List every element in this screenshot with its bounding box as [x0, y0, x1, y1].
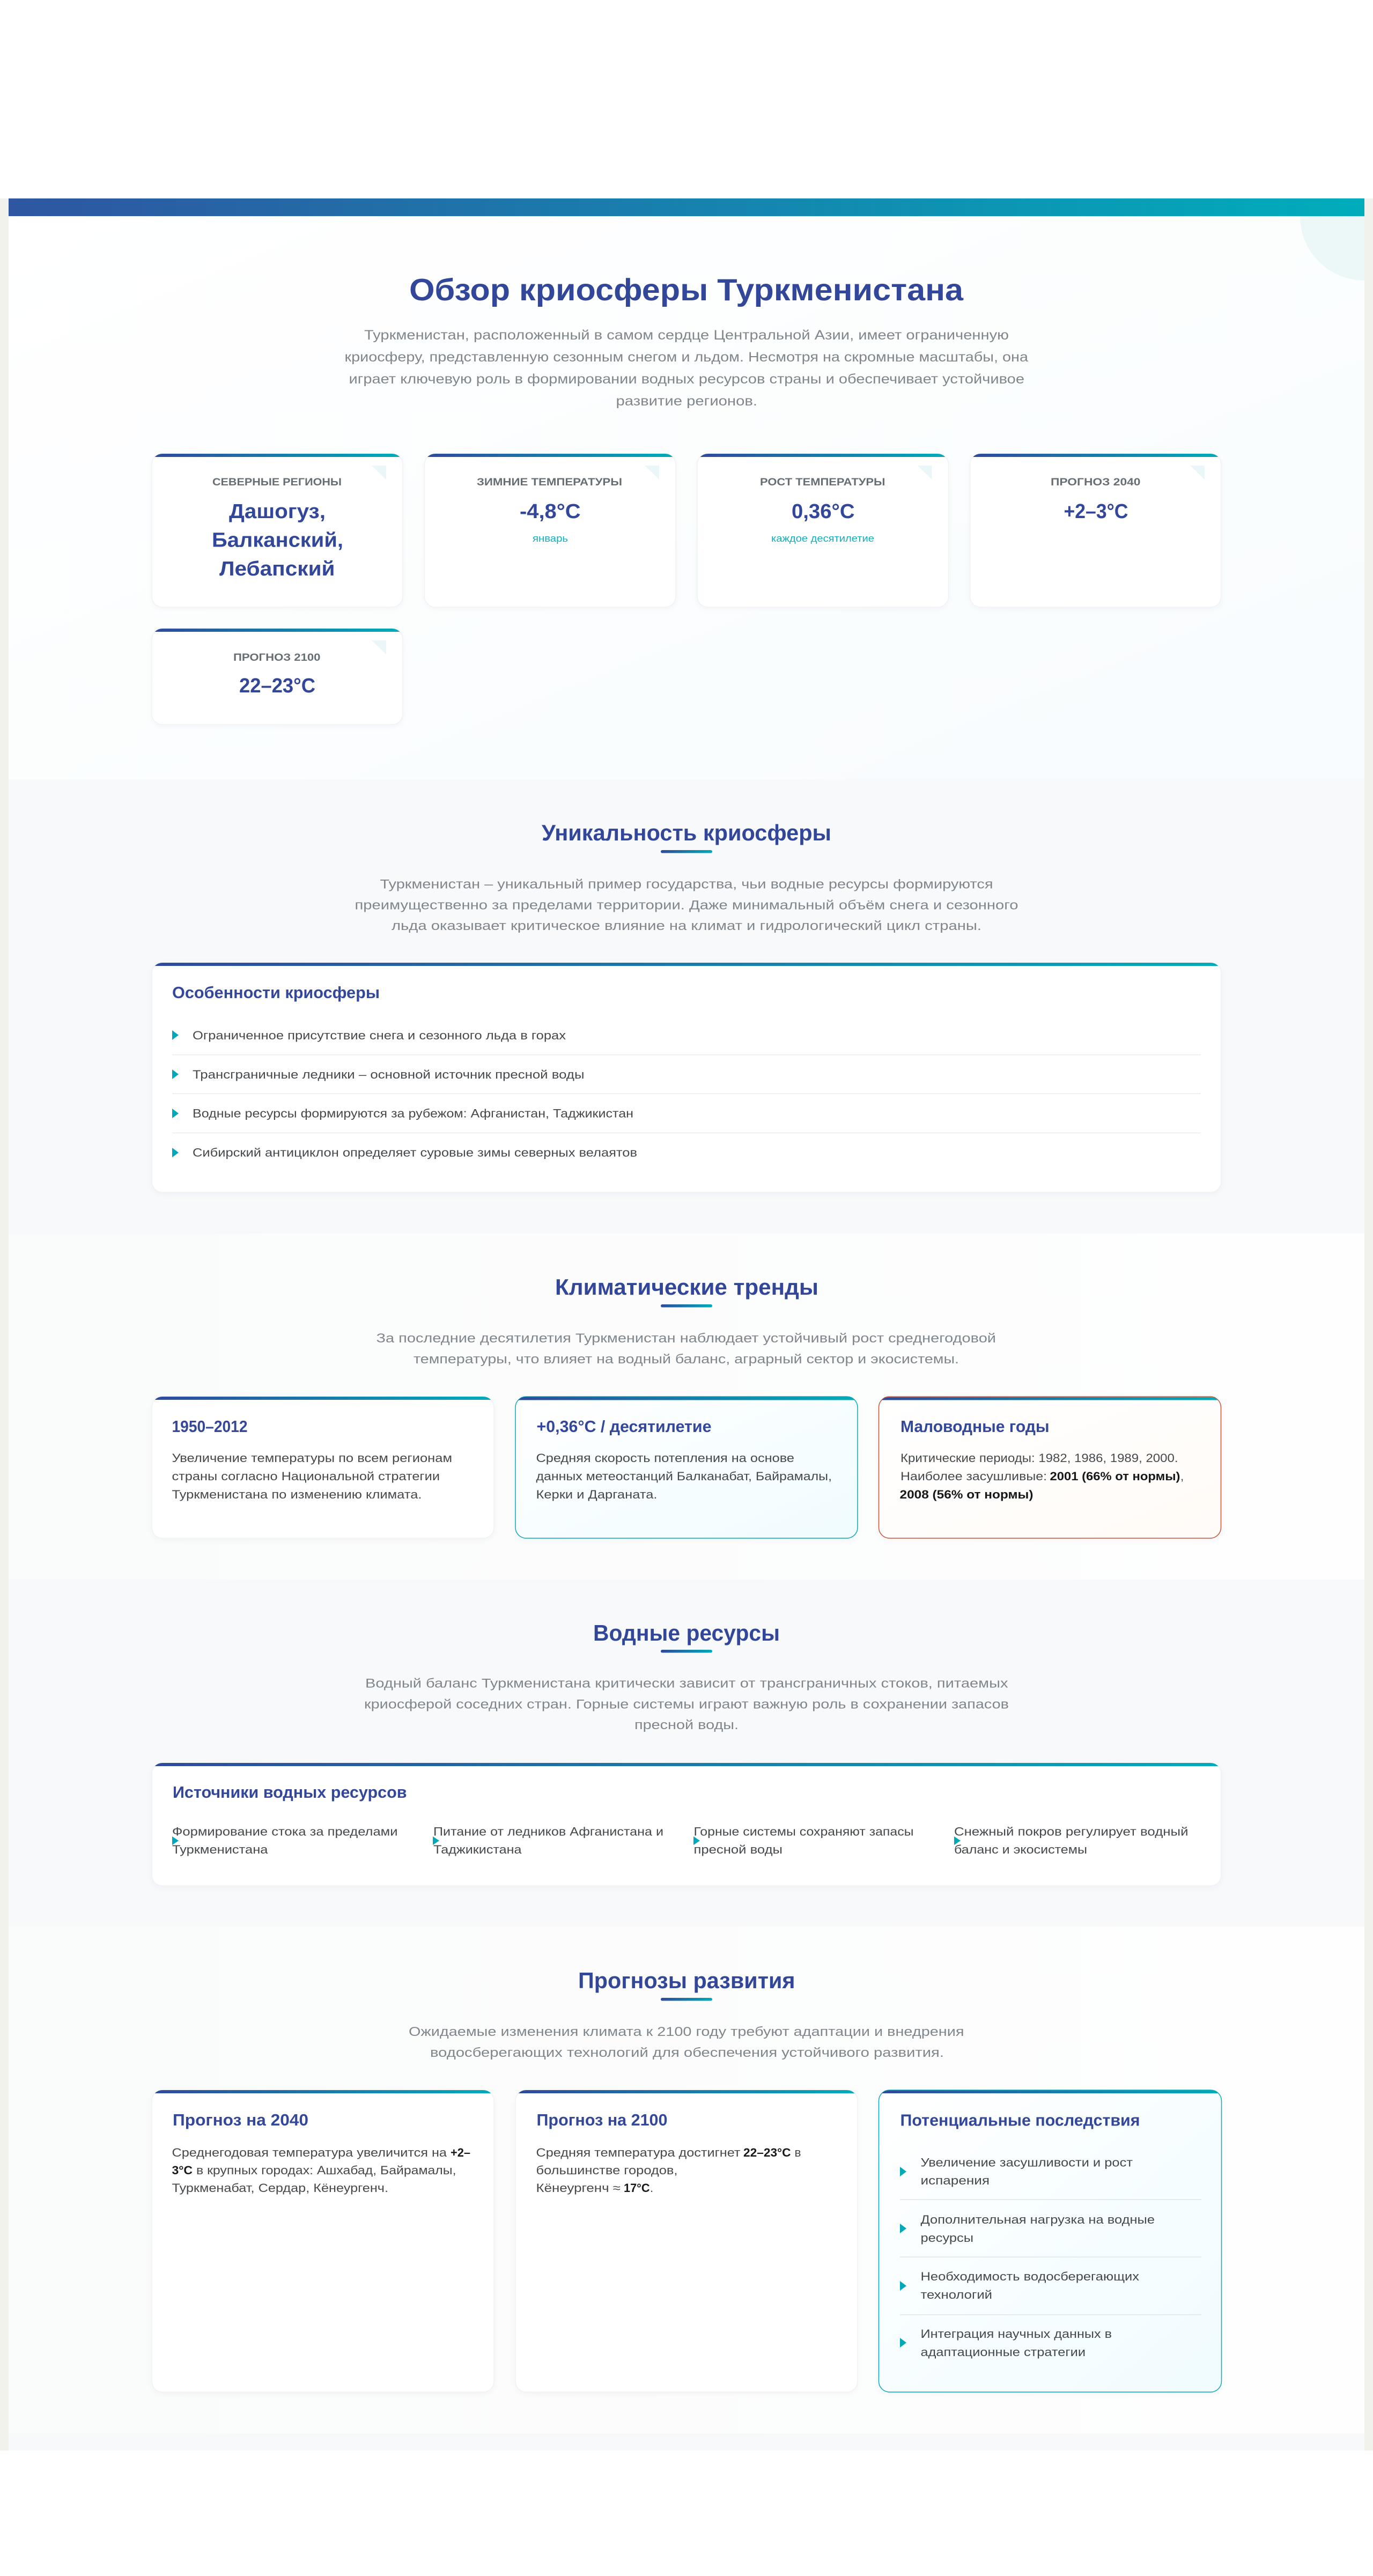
panel: источники водных ресурсов: Источники водных ресурсов [173, 1783, 407, 1802]
card: прогноз на 2100: большинстве городов, [536, 2164, 678, 2177]
panel: особенности криосферы: Особенности криосферы [172, 984, 380, 1002]
card: маловодные годы: Наиболее засушливые: [900, 1470, 1047, 1483]
card: прогноз на 2100: Кёнеургенч ≈ [536, 2181, 621, 2195]
card: потенциальные последствия: Дополнительная нагрузка на водные [920, 2213, 1155, 2226]
stat card: зимние температуры: ЗИМНИЕ ТЕМПЕРАТУРЫ [477, 477, 622, 488]
card: прогноз на 2100: в [795, 2146, 801, 2159]
stat card: рост температуры [697, 454, 948, 607]
stat card: прогноз 2100: ПРОГНОЗ 2100 [233, 652, 321, 663]
stat card: зимние температуры: январь [533, 533, 568, 544]
stat card: прогноз 2100 [152, 629, 403, 725]
stat card: рост температуры: каждое десятилетие [771, 533, 874, 544]
intro: прогнозы: водосберегающих технологий для обеспечения устойчивого развития. [430, 2046, 944, 2060]
card: +0,36°C / десятилетие: Средняя скорость потепления на основе [536, 1451, 794, 1465]
card: 1950–2012: страны согласно Национальной стратегии [172, 1470, 440, 1483]
intro: водные ресурсы: Водный баланс Туркменистана критически зависит от трансграничных стоков, питаемых [365, 1677, 1008, 1691]
stat card: северные регионы: СЕВЕРНЫЕ РЕГИОНЫ [212, 477, 342, 488]
card: прогноз на 2040 [152, 2090, 494, 2392]
stat card: прогноз 2040: ПРОГНОЗ 2040 [1051, 477, 1140, 488]
stat card: северные регионы [152, 454, 403, 607]
card: маловодные годы: Критические периоды: 1982, 1986, 1989, 2000. [900, 1451, 1178, 1465]
panel: источники водных ресурсов: Таджикистана [433, 1843, 522, 1856]
panel: источники водных ресурсов: Горные системы сохраняют запасы [694, 1825, 914, 1839]
card: прогноз на 2040: Туркменабат, Сердар, Кёнеургенч. [172, 2181, 388, 2195]
intro text: развитие регионов. [616, 394, 757, 409]
stat card: рост температуры: 0,36°C [792, 500, 855, 523]
card: маловодные годы [879, 1397, 1221, 1538]
panel: источники водных ресурсов: Формирование стока за пределами [172, 1825, 398, 1839]
intro: тренды [377, 1331, 996, 1367]
panel: источники водных ресурсов [152, 1763, 1221, 1886]
card: 1950–2012: Туркменистана по изменению климата. [172, 1488, 422, 1501]
intro text: криосферу, представленную сезонным снегом и льдом. Несмотря на скромные масштабы, она [344, 350, 1028, 365]
card: прогноз на 2040: в крупных городах: Ашхабад, Байрамалы, [196, 2164, 456, 2177]
stat card: прогноз 2040 [970, 454, 1221, 607]
card: 1950–2012: Увеличение температуры по всем регионам [172, 1451, 452, 1465]
panel: особенности криосферы: Ограниченное присутствие снега и сезонного льда в горах [193, 1029, 566, 1042]
card: прогноз на 2100: Средняя температура достигнет [536, 2146, 740, 2159]
heading: прогнозы развития: Прогнозы развития [578, 1968, 795, 1993]
intro: уникальность: Туркменистан – уникальный пример государства, чьи водные ресурсы формируются [380, 877, 993, 891]
intro text [344, 328, 1028, 409]
card: потенциальные последствия: технологий [920, 2288, 992, 2301]
card: 1950–2012 [152, 1397, 494, 1538]
panel: источники водных ресурсов: пресной воды [694, 1843, 783, 1856]
panel: overview header [344, 273, 1028, 409]
stat card: зимние температуры: -4,8°C [520, 500, 580, 523]
card: потенциальные последствия: Интеграция научных данных в [920, 2327, 1112, 2341]
heading: климатические тренды: Климатические тренды [555, 1274, 818, 1300]
panel: особенности криосферы: Трансграничные ледники – основной источник пресной воды [193, 1068, 585, 1081]
intro: прогнозы: Ожидаемые изменения климата к 2100 году требуют адаптации и внедрения [409, 2025, 964, 2039]
card: +0,36°C / десятилетие: данных метеостанций Балканабат, Байрамалы, [536, 1470, 832, 1483]
panel: особенности криосферы: Сибирский антициклон определяет суровые зимы северных велаятов [193, 1146, 637, 1160]
card: маловодные годы: Маловодные годы [900, 1418, 1049, 1436]
intro: водные ресурсы: криосферой соседних стран. Горные системы играют важную роль в сохранении запасов [364, 1697, 1009, 1712]
panel: особенности криосферы: Водные ресурсы формируются за рубежом: Афганистан, Таджикистан [193, 1107, 633, 1120]
card: потенциальные последствия: адаптационные стратегии [920, 2345, 1086, 2359]
card: прогноз на 2040: Среднегодовая температура увеличится на [172, 2146, 447, 2159]
card: потенциальные последствия: ресурсы [920, 2231, 973, 2245]
stat card: северные регионы: Балканский, [212, 529, 343, 551]
decorative quarter circle [1300, 216, 1364, 281]
intro: водные ресурсы [364, 1677, 1009, 1732]
card: +0,36°C / десятилетие: Керки и Дарганата. [536, 1488, 658, 1501]
panel: источники водных ресурсов: баланс и экосистемы [954, 1843, 1087, 1856]
title: Обзор криосферы Туркменистана [409, 273, 964, 307]
intro: уникальность: льда оказывает критическое влияние на климат и гидрологический цикл страны. [392, 919, 981, 933]
card: прогноз на 2100: 22–23°C [743, 2146, 791, 2159]
panel: источники водных ресурсов: Питание от ледников Афганистана и [433, 1825, 663, 1839]
stat card: зимние температуры [425, 454, 676, 607]
heading: уникальность криосферы: Уникальность криосферы [542, 820, 831, 845]
card: маловодные годы: 2008 (56% от нормы) [900, 1488, 1033, 1501]
intro: тренды: За последние десятилетия Туркменистан наблюдает устойчивый рост среднегодовой [377, 1331, 996, 1346]
intro: тренды: температуры, что влияет на водный баланс, аграрный сектор и экосистемы. [414, 1352, 959, 1367]
card: потенциальные последствия [879, 2090, 1222, 2392]
card: +0,36°C / десятилетие [515, 1397, 858, 1538]
card: маловодные годы: 2001 (66% от нормы) [1050, 1470, 1180, 1483]
card: потенциальные последствия: Увеличение засушливости и рост [920, 2156, 1133, 2169]
stat card: рост температуры: РОСТ ТЕМПЕРАТУРЫ [760, 477, 885, 488]
panel: источники водных ресурсов: Снежный покров регулирует водный [954, 1825, 1189, 1839]
intro: уникальность: преимущественно за пределами территории. Даже минимальный объём снега и сезонного [355, 898, 1018, 913]
card: потенциальные последствия: испарения [920, 2174, 990, 2187]
card: потенциальные последствия: Необходимость водосберегающих [920, 2270, 1139, 2283]
card: прогноз на 2100: Прогноз на 2100 [536, 2111, 667, 2129]
card: прогноз на 2040: 3°C [172, 2164, 193, 2177]
card: прогноз на 2100: . [650, 2181, 653, 2195]
stat card: северные регионы: Дашогуз, [229, 500, 326, 523]
card: +0,36°C / десятилетие: +0,36°C / десятилетие [536, 1418, 711, 1436]
stat card: прогноз 2040: +2–3°C [1064, 500, 1128, 523]
intro: уникальность [355, 877, 1018, 933]
card: прогноз на 2040: +2– [451, 2146, 470, 2159]
heading: водные ресурсы: Водные ресурсы [593, 1620, 780, 1645]
card: 1950–2012: 1950–2012 [172, 1418, 248, 1436]
panel: особенности криосферы [152, 963, 1221, 1192]
card: маловодные годы: , [1180, 1470, 1184, 1483]
panel: источники водных ресурсов: Туркменистана [172, 1843, 268, 1856]
top gradient bar [9, 198, 1364, 216]
intro: водные ресурсы: пресной воды. [634, 1718, 739, 1732]
intro: прогнозы [409, 2025, 964, 2060]
card: прогноз на 2100 [515, 2090, 858, 2392]
stat card: северные регионы: Лебапский [219, 557, 335, 580]
intro text: играет ключевую роль в формировании водных ресурсов страны и обеспечивает устойчивое [349, 372, 1024, 387]
card: прогноз на 2040: Прогноз на 2040 [173, 2111, 308, 2129]
card: потенциальные последствия: Потенциальные последствия [900, 2111, 1140, 2129]
stat card: прогноз 2100: 22–23°C [239, 674, 315, 697]
intro text: Туркменистан, расположенный в самом сердце Центральной Азии, имеет ограниченную [364, 328, 1009, 343]
card: прогноз на 2100: 17°C [624, 2181, 650, 2195]
